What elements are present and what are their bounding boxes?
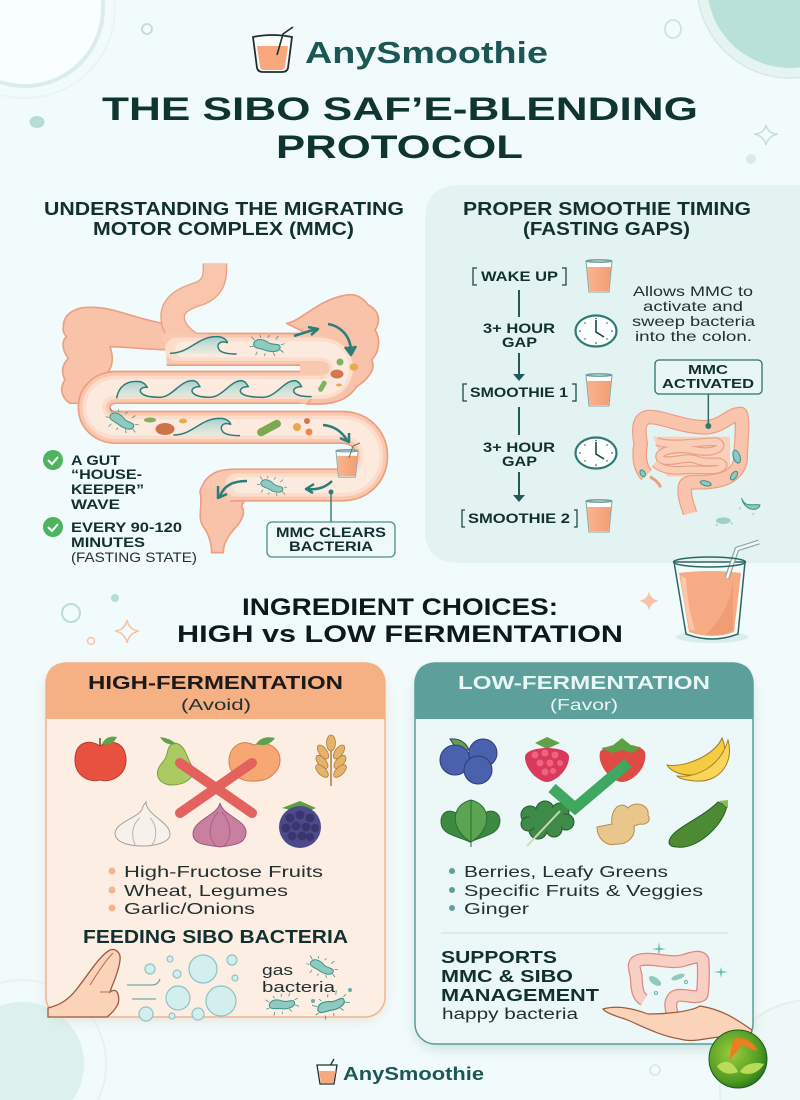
list: favored foods [449, 864, 703, 918]
heading: understanding the MMC: UNDERSTANDING THE MIGRATING [44, 199, 404, 219]
icon: pear [157, 737, 193, 785]
text: MMC sweep explanation: activate and [643, 298, 743, 314]
step: smoothie 1 [463, 374, 612, 406]
timeline connector 1 [518, 290, 520, 317]
illustration: gas bubbles [127, 955, 238, 1021]
food particles [144, 358, 358, 438]
waves [117, 337, 312, 436]
text: MMC sweep explanation: Allows MMC to [633, 283, 753, 299]
arrows [218, 324, 356, 498]
step: wake up [473, 260, 612, 292]
icon: peach [229, 737, 280, 781]
icon: red cross [180, 763, 252, 813]
list: avoid foods: Garlic/Onions [124, 901, 255, 918]
pointer: MMC clears [328, 490, 334, 522]
gap 2 [483, 438, 616, 469]
icon: spinach [441, 800, 500, 847]
title: PROTOCOL [276, 129, 523, 165]
logo: header [253, 27, 548, 72]
diagram: intestine [62, 263, 379, 553]
icon: ginger [597, 804, 649, 845]
text: supports MMC: happy bacteria [442, 1006, 578, 1023]
bullet: housekeeper wave: KEEPER” [71, 482, 144, 497]
icon: blackberry [279, 801, 321, 848]
arrow 1 [513, 353, 525, 381]
bullet: housekeeper wave: WAVE [71, 497, 120, 512]
step: smoothie 2 [462, 500, 612, 532]
icon: footer glass [317, 1059, 337, 1084]
small intestine tube [94, 349, 372, 492]
text: MMC sweep explanation: into the colon. [635, 328, 752, 344]
icon: large smoothie glass [674, 542, 759, 643]
step: smoothie 2: SMOOTHIE 2 [468, 510, 570, 526]
heading: ingredient choices [177, 594, 623, 648]
icon: green check [552, 763, 628, 808]
text: supports MMC: MMC & SIBO [441, 966, 573, 986]
bullet: frequency: EVERY 90-120 [71, 520, 182, 535]
bullet: housekeeper wave [43, 450, 144, 512]
icon: strawberry [600, 738, 645, 782]
bullet: frequency [43, 517, 197, 565]
heading: understanding the MMC: MOTOR COMPLEX (MMC) [93, 219, 354, 239]
bullet: housekeeper wave: A GUT [71, 453, 121, 468]
lumen highlight [94, 349, 372, 485]
title [102, 91, 698, 165]
icons: favored foods [440, 737, 730, 847]
panel: smoothie timing [425, 185, 800, 563]
timeline connector 2 [518, 407, 520, 435]
large intestine left [62, 307, 177, 403]
illustration: open hand [603, 1006, 752, 1040]
rectum [200, 472, 253, 553]
callout: MMC clears bacteria: BACTERIA [289, 539, 373, 554]
gap 2: GAP [502, 453, 537, 469]
title: THE SIBO SAF’E-BLENDING [102, 91, 698, 127]
callout: MMC activated: MMC [688, 362, 729, 377]
heading: understanding the MMC [44, 199, 404, 239]
text: MMC sweep explanation: sweep bacteria [632, 313, 755, 329]
arrow 2 [513, 472, 525, 502]
step: wake up: WAKE UP [481, 268, 558, 284]
header: low fermentation [415, 663, 753, 719]
icon: glass inside gut [336, 443, 360, 477]
header: low fermentation: LOW-FERMENTATION [458, 672, 710, 693]
text: gas bacteria labels: gas [262, 962, 293, 979]
text: supports MMC: MANAGEMENT [441, 985, 599, 1005]
header: high fermentation: HIGH-FERMENTATION [88, 672, 343, 693]
esophagus tube [173, 263, 215, 347]
list: avoid foods: Wheat, Legumes [124, 883, 288, 900]
icon: kale [521, 801, 574, 846]
panel: low fermentation [415, 663, 753, 1050]
icon: green badge [709, 1030, 767, 1088]
bullet: frequency: MINUTES [71, 535, 145, 550]
header: high fermentation: (Avoid) [181, 697, 251, 714]
large intestine right [287, 295, 379, 404]
list: favored foods: Specific Fruits & Veggies [464, 883, 703, 900]
panel: high fermentation [46, 663, 385, 1024]
icon: onion [193, 803, 246, 847]
illustration: stop hand [48, 950, 120, 1017]
gap 1 [483, 316, 616, 350]
step: smoothie 1: SMOOTHIE 1 [470, 384, 568, 400]
icon: apple [75, 737, 126, 781]
heading: ingredient choices: INGREDIENT CHOICES: [242, 594, 558, 621]
icon: banana [667, 738, 730, 781]
timeline [462, 260, 616, 532]
callout: MMC activated: ACTIVATED [662, 376, 754, 391]
text: supports MMC [441, 947, 599, 1023]
header: high fermentation [46, 663, 385, 719]
bullet: frequency: (FASTING STATE) [71, 550, 197, 565]
bacteria [103, 335, 288, 497]
illustration: happy colon [634, 942, 728, 1013]
header: low fermentation: (Favor) [550, 697, 618, 714]
icon: garlic [115, 802, 170, 846]
heading: smoothie timing: PROPER SMOOTHIE TIMING [463, 199, 751, 219]
bullet: housekeeper wave: “HOUSE- [71, 467, 142, 482]
logo wordmark: AnySmoothie [305, 35, 548, 70]
text: MMC sweep explanation [632, 283, 755, 344]
callout: MMC clears bacteria [267, 522, 395, 557]
text: gas bacteria labels: bacteria [262, 979, 336, 996]
icons: avoid foods [75, 735, 348, 848]
text: supports MMC: SUPPORTS [441, 947, 557, 967]
diagram: digestive tract [639, 394, 760, 526]
gap 1: 3+ HOUR [483, 320, 555, 336]
gut shapes [62, 263, 379, 553]
text: gas bacteria labels [262, 962, 336, 996]
list: favored foods: Berries, Leafy Greens [464, 864, 668, 881]
icon: wheat [314, 735, 348, 786]
heading: ingredient choices: HIGH vs LOW FERMENTATION [177, 621, 623, 648]
gap 2: 3+ HOUR [483, 439, 555, 455]
list: avoid foods [108, 864, 323, 918]
panel: MMC explanation [43, 199, 404, 565]
subheading: feeding bacteria: FEEDING SIBO BACTERIA [83, 927, 348, 947]
icon: zucchini [669, 800, 728, 847]
footer logo [317, 1059, 484, 1084]
callout: MMC clears bacteria: MMC CLEARS [276, 525, 386, 540]
illustration: bacteria group [263, 954, 352, 1024]
icon: blueberries [440, 739, 497, 784]
list: favored foods: Ginger [464, 901, 530, 918]
icon: smoothie glass [253, 27, 293, 72]
footer wordmark: AnySmoothie [343, 1064, 484, 1084]
inner gap [140, 400, 348, 414]
heading: smoothie timing [463, 199, 751, 239]
heading: smoothie timing: (FASTING GAPS) [523, 219, 690, 239]
icon: raspberry [525, 737, 569, 782]
list: avoid foods: High-Fructose Fruits [124, 864, 323, 881]
callout: MMC activated [655, 360, 762, 394]
gap 1: GAP [502, 334, 537, 350]
